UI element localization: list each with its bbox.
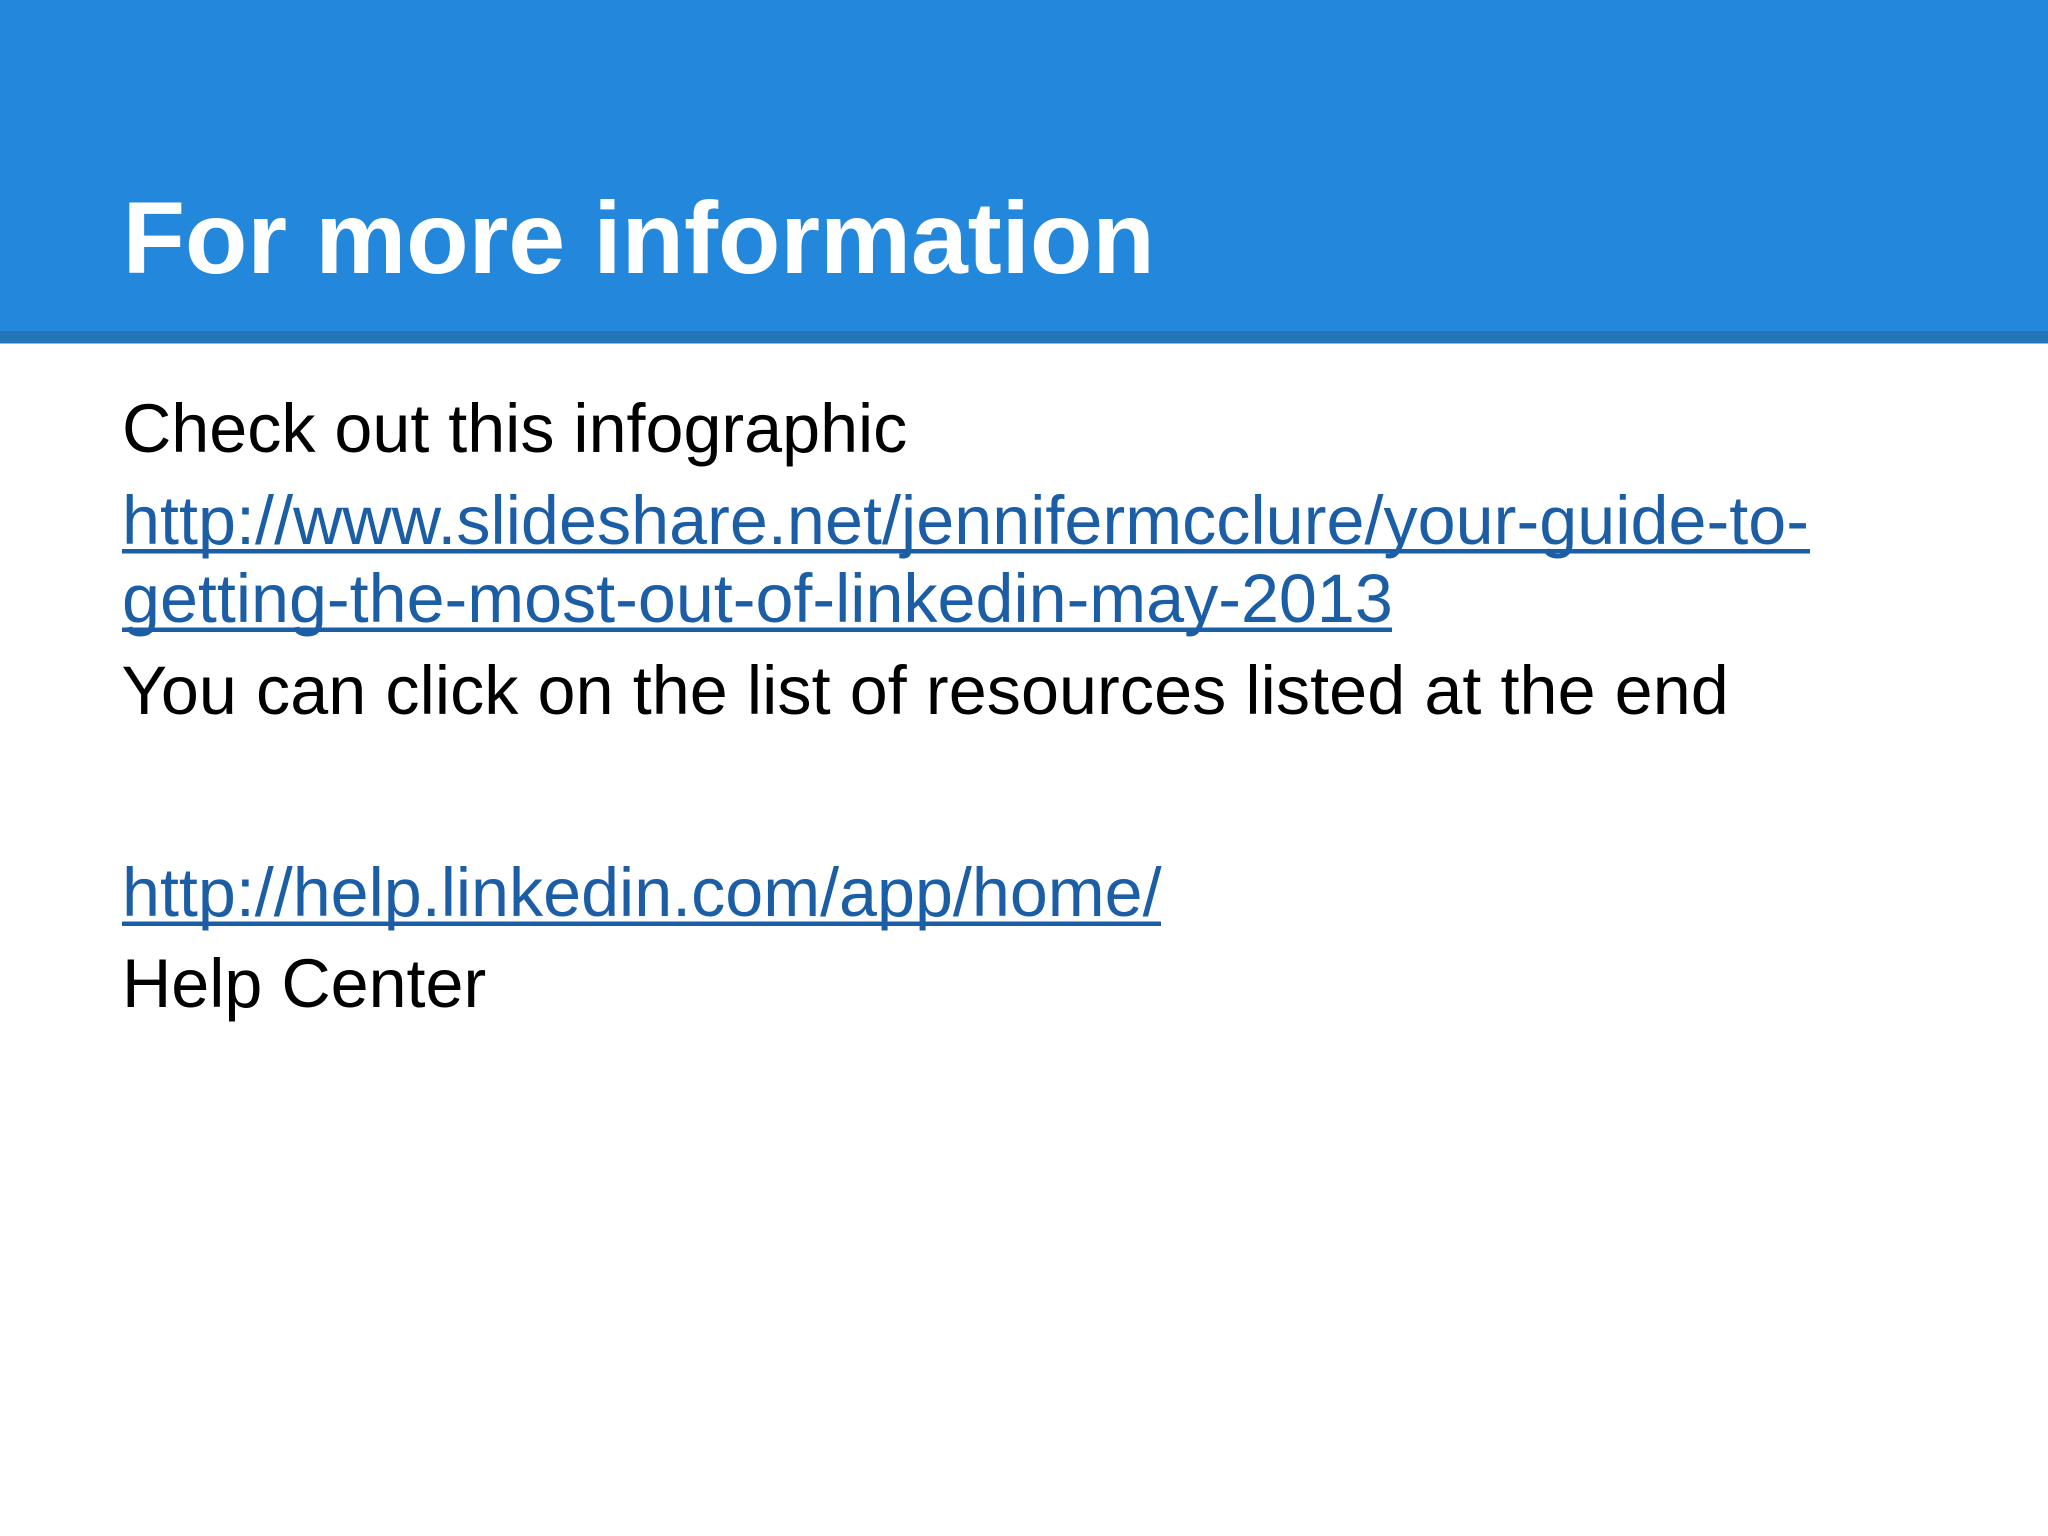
text: help center: Help Center [122,946,486,1022]
link: slideshare infographic: getting-the-most-out-of-linkedin-may-2013 [122,561,1393,637]
header banner [0,0,2048,344]
link: slideshare infographic [122,483,1810,637]
text: resources note: You can click on the list of resources listed at the end [122,653,1729,729]
text: check out this infographic: Check out this infographic [122,391,907,467]
title: For more information [122,180,1155,295]
link: linkedin help: http://help.linkedin.com/app/home/ [122,855,1162,931]
link: slideshare infographic: http://www.slideshare.net/jennifermcclure/your-guide-to- [122,483,1809,559]
